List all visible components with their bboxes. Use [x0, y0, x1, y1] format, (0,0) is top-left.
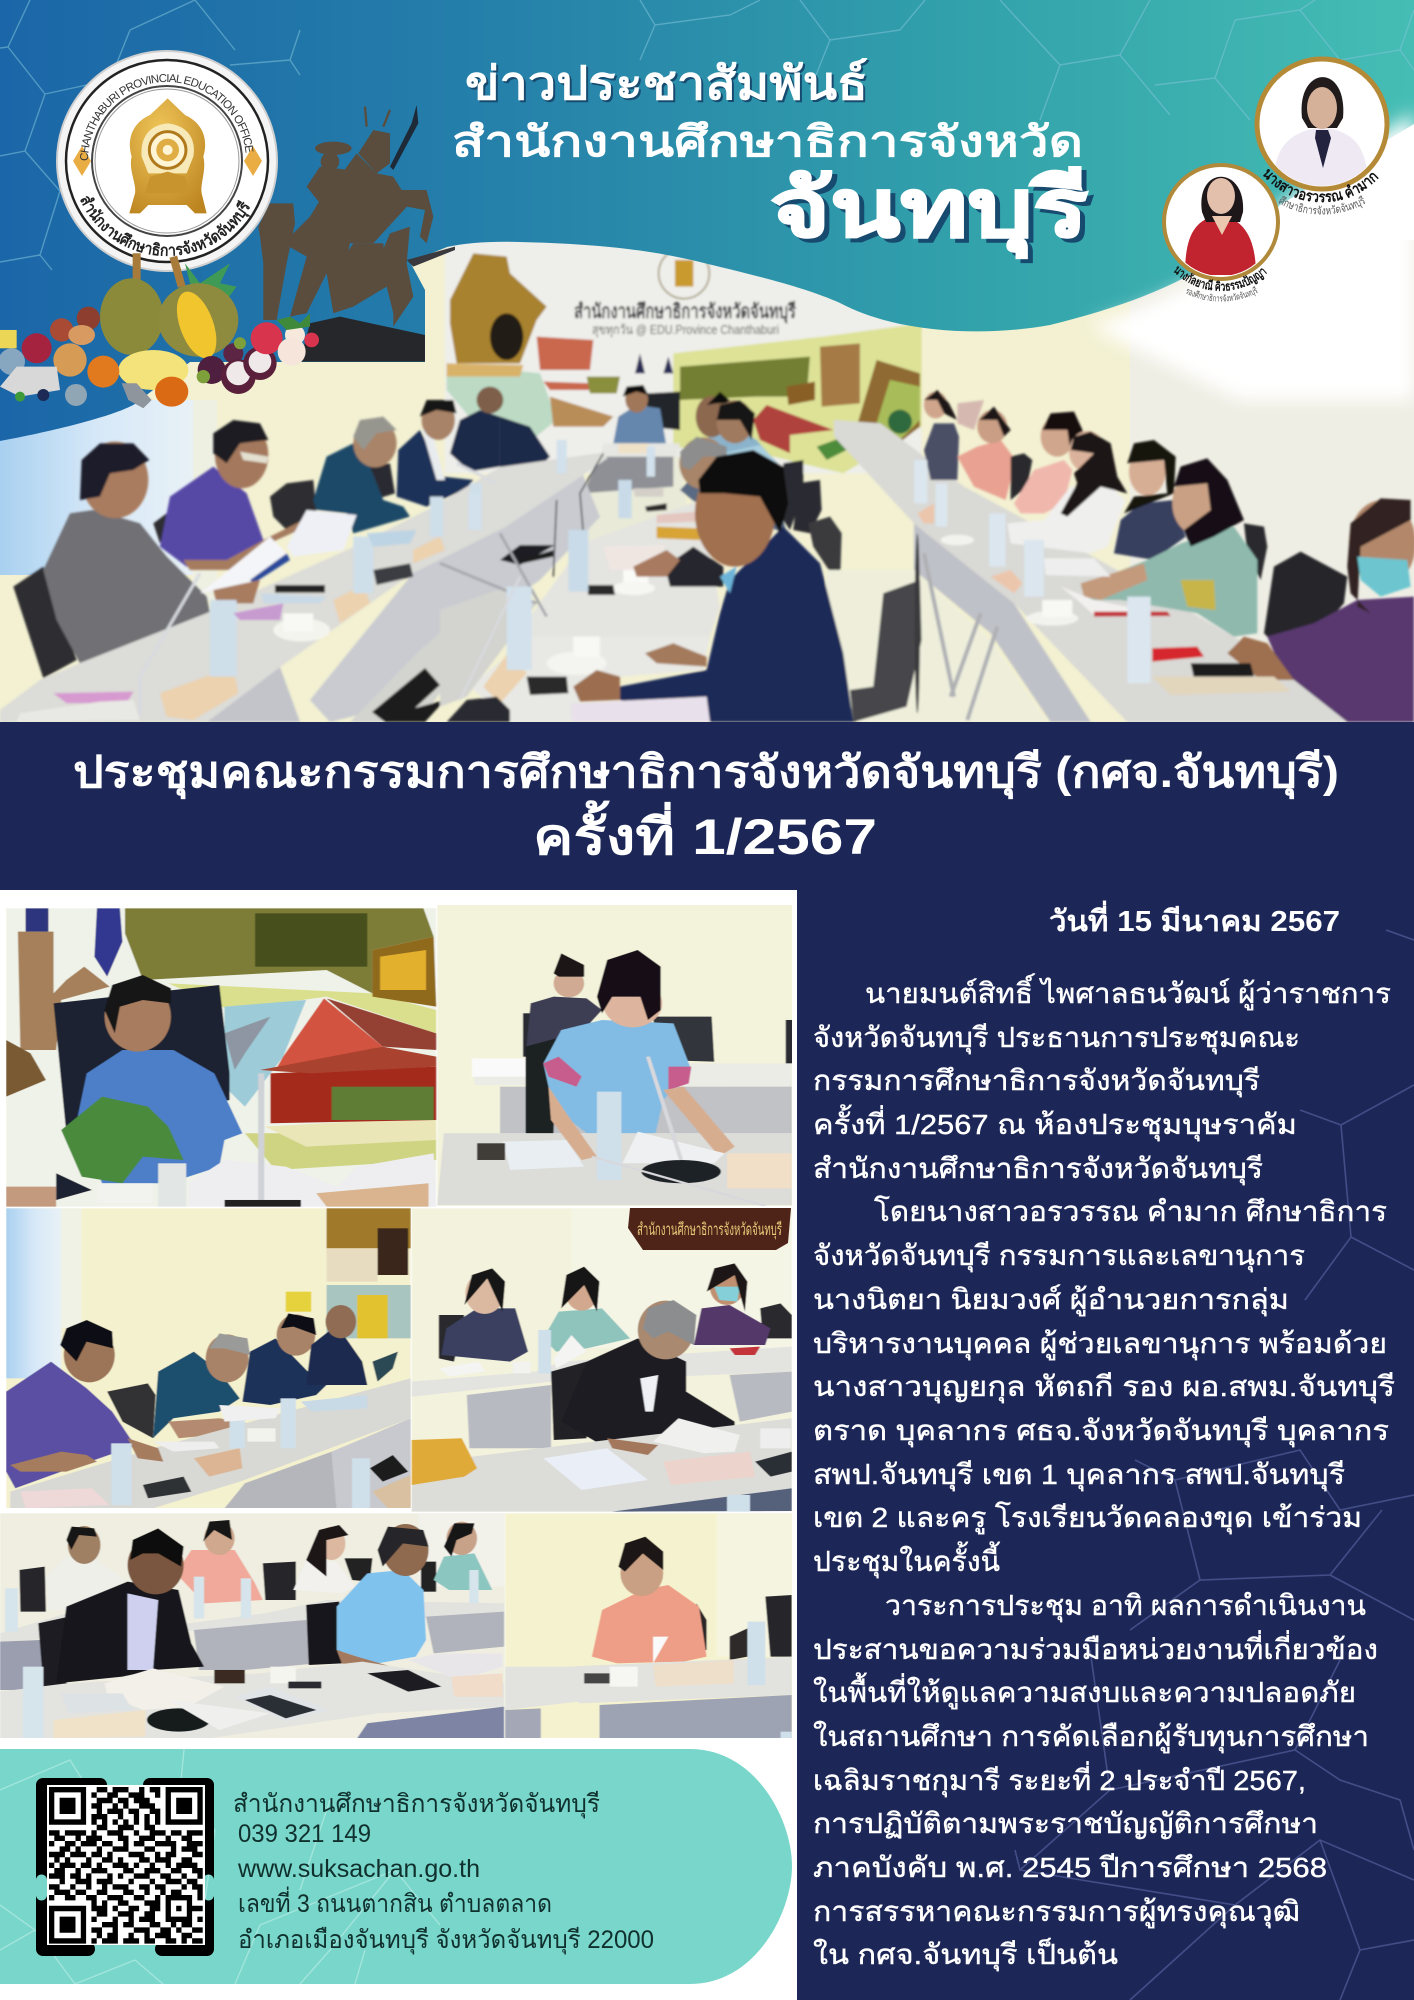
logo badge — [56, 50, 278, 272]
headline: ประชุมคณะกรรมการศึกษาธิการจังหวัดจันทบุรี (กศจ.จันทบุรี) — [73, 748, 1339, 800]
title: public relations news — [452, 57, 1093, 263]
portrait: director of education — [1257, 59, 1387, 218]
wooden sign — [628, 1208, 791, 1250]
article body text: ในพื้นที่ให้ดูแลความสงบและความปลอดภัย — [813, 1672, 1356, 1710]
article body text: นางนิตยา นิยมวงศ์ ผู้อำนวยการกลุ่ม — [813, 1284, 1289, 1317]
article body text: สพป.จันทบุรี เขต 1 บุคลากร สพป.จันทบุรี — [813, 1459, 1345, 1492]
date: วันที่ 15 มีนาคม 2567 — [1049, 900, 1340, 938]
person: purple blouse woman with mask — [1227, 498, 1414, 722]
person: grey-blue top woman — [1114, 440, 1186, 560]
portrait: director of education: ศึกษาธิการจังหวัดจันทบุรี — [1278, 195, 1365, 214]
logo badge: CHANTHABURI PROVINCIAL EDUCATION OFFICE — [80, 74, 254, 160]
right table items — [914, 460, 1291, 713]
person: green blouse woman — [1081, 458, 1257, 637]
logo badge: สำนักงานศึกษาธิการจังหวัดจันทบุรี — [80, 196, 250, 256]
headline — [73, 748, 1339, 865]
contact details: เลขที่ 3 ถนนตากสิน ตำบลตลาด — [238, 1886, 552, 1918]
article body text: วาระการประชุม อาทิ ผลการดำเนินงาน — [885, 1590, 1366, 1623]
article body text: ประสานขอความร่วมมือหน่วยงานที่เกี่ยวข้อง — [813, 1630, 1378, 1665]
mural caption: สำนักงานศึกษาธิการจังหวัดจันทบุรี — [574, 300, 796, 324]
contact details: 039 321 149 — [238, 1820, 371, 1848]
person: teal shirt man — [313, 417, 410, 533]
article body text: นางสาวบุญยกุล หัตถกี รอง ผอ.สพม.จันทบุรี — [813, 1371, 1395, 1404]
hexagon pattern: banner — [0, 0, 1414, 270]
person: pink blouse woman — [957, 407, 1016, 500]
article body text: การปฏิบัติตามพระราชบัญญัติการศึกษา — [813, 1808, 1318, 1839]
title: public relations news: ข่าวประชาสัมพันธ์ — [467, 59, 870, 111]
mural caption — [574, 300, 796, 338]
article body text: เขต 2 และครู โรงเรียนวัดคลองขุด เข้าร่วม — [813, 1501, 1362, 1535]
left table items — [17, 463, 497, 722]
title: public relations news: จันทบุรี — [775, 168, 1093, 263]
contact details — [233, 1790, 654, 1955]
emblem — [129, 98, 207, 213]
photo: woman in floral dress — [437, 905, 794, 1206]
centre table — [440, 440, 720, 722]
chair backs left — [13, 463, 395, 678]
article body text: ตราด บุคลากร ศธจ.จังหวัดจันทบุรี บุคลากร — [813, 1415, 1389, 1448]
statue — [258, 105, 455, 362]
article body text: ภาคบังคับ พ.ศ. 2545 ปีการศึกษา 2568 — [813, 1852, 1327, 1883]
contact footer — [0, 1740, 792, 1990]
article body text: กรรมการศึกษาธิการจังหวัดจันทบุรี — [813, 1065, 1260, 1098]
title: public relations news: จันทบุรี — [770, 164, 1088, 259]
photo: woman in pink — [505, 1513, 793, 1738]
article body text: ใน กศจ.จันทบุรี เป็นต้น — [813, 1937, 1118, 1972]
article body text: ในสถานศึกษา การคัดเลือกผู้รับทุนการศึกษา — [813, 1720, 1369, 1754]
article body text: นายมนต์สิทธิ์ ไพศาลธนวัฒน์ ผู้ว่าราชการ — [865, 973, 1391, 1011]
wooden sign: สำนักงานศึกษาธิการจังหวัดจันทบุรี — [637, 1220, 782, 1240]
photo collage white backing — [0, 890, 797, 1749]
article body text: บริหารงานบุคคล ผู้ช่วยเลขานุการ พร้อมด้วย — [813, 1328, 1387, 1361]
article body text: ประชุมในครั้งนี้ — [813, 1541, 1000, 1579]
person: dark suit man — [450, 387, 550, 473]
contact details: สำนักงานศึกษาธิการจังหวัดจันทบุรี — [233, 1790, 600, 1819]
photo: men writing — [6, 1208, 411, 1508]
article body text: โดยนางสาวอรวรรณ คำมาก ศึกษาธิการ — [874, 1195, 1387, 1227]
article body text: จังหวัดจันทบุรี ประธานการประชุมคณะ — [813, 1022, 1300, 1055]
person: foreground man navy jacket — [572, 450, 853, 722]
left table — [0, 453, 608, 722]
centre scene: head of table and far side — [577, 385, 842, 587]
main meeting photo — [0, 240, 1414, 722]
navy page background — [0, 722, 1414, 2000]
photo: officials with sign — [412, 1208, 792, 1512]
photo: participants with documents — [0, 1513, 505, 1738]
big empty chair foreground — [850, 580, 922, 722]
name caption: นางกัลยาณี คิวธรรมปัญญา — [1174, 266, 1267, 292]
fruits and gems — [0, 253, 319, 408]
women along right table — [914, 390, 1414, 722]
contact details: อำเภอเมืองจันทบุรี จังหวัดจันทบุรี 22000 — [238, 1926, 654, 1955]
name caption: นางสาวอรวรรณ คำมาก — [1263, 169, 1379, 202]
statue plinth — [300, 317, 425, 362]
photo: chairman — [6, 908, 436, 1207]
person: pink top woman — [1014, 412, 1084, 513]
title: public relations news: สำนักงานศึกษาธิการจังหวัด — [452, 118, 1083, 165]
person: purple check shirt man — [160, 420, 307, 570]
headline: ครั้งที่ 1/2567 — [533, 800, 877, 865]
hexagon pattern: text panel — [1015, 930, 1414, 2000]
wall mural — [445, 240, 922, 473]
contact details: www.suksachan.go.th — [237, 1855, 480, 1883]
article body text: การสรรหาคณะกรรมการผู้ทรงคุณวุฒิ — [813, 1896, 1300, 1929]
header banner with wave — [0, 0, 1414, 441]
right table — [821, 420, 1381, 722]
portrait: deputy director: รองศึกษาธิการจังหวัดจันทบุรี — [1186, 286, 1258, 302]
mural caption: สุขทุกวัน @ EDU.Province Chanthaburi — [592, 322, 779, 338]
article body text: ครั้งที่ 1/2567 ณ ห้องประชุมบุษราคัม — [813, 1104, 1297, 1142]
title: public relations news: ข่าวประชาสัมพันธ์ — [465, 57, 868, 109]
person: far end woman — [924, 390, 959, 480]
white glow — [1090, 112, 1414, 400]
window curtain — [0, 400, 217, 600]
article body text — [813, 973, 1395, 1972]
QR code — [36, 1778, 214, 1956]
person: white top woman — [1007, 431, 1127, 553]
article body text: จังหวัดจันทบุรี กรรมการและเลขานุการ — [813, 1240, 1305, 1273]
portrait: deputy director — [1164, 165, 1278, 304]
person: navy suit man — [397, 400, 473, 507]
article body text: เฉลิมราชกุมารี ระยะที่ 2 ประจำปี 2567, — [813, 1761, 1306, 1798]
article body text: สำนักงานศึกษาธิการจังหวัดจันทบุรี — [813, 1153, 1263, 1186]
person: grey shirt man — [43, 442, 210, 663]
